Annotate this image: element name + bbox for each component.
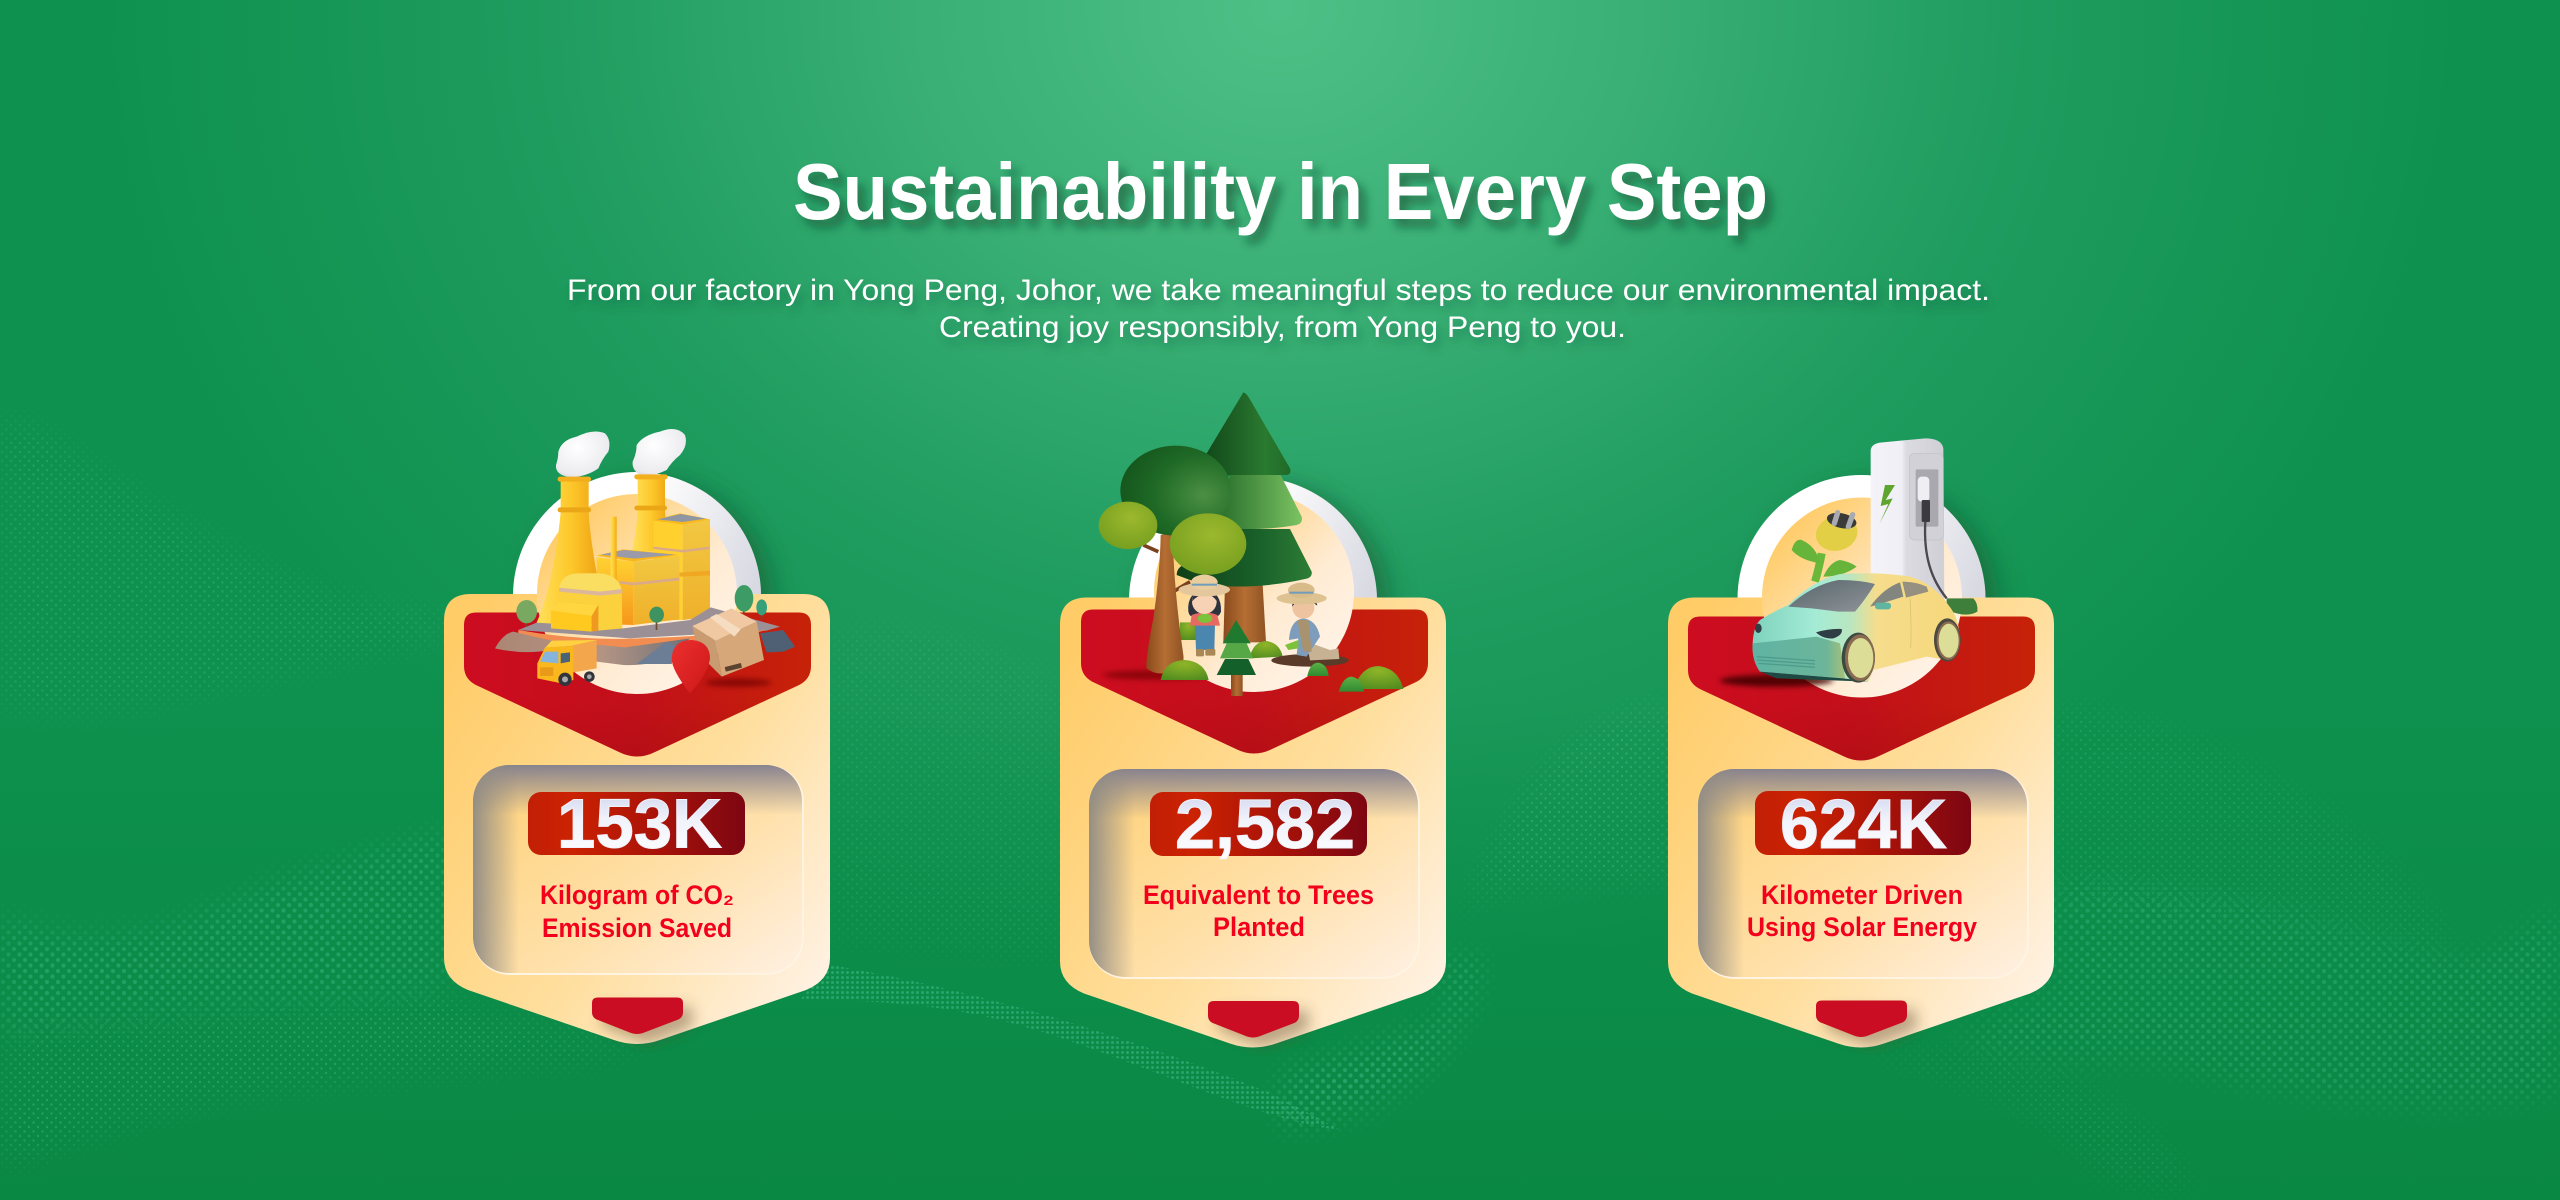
peach circle <box>1762 498 1962 698</box>
stat number pill: 153K <box>557 784 722 862</box>
stat label: Kilometer Driven <box>1761 880 1963 910</box>
plug flower <box>1792 510 1861 582</box>
panel: trees planted <box>1060 392 1446 1048</box>
panel: kilometers on solar energy <box>1668 438 2054 1048</box>
red bottom tab <box>1208 1001 1299 1038</box>
backing white circle <box>1738 475 1986 723</box>
card body <box>444 594 830 1044</box>
peach circle <box>1154 492 1354 692</box>
inset stat panel <box>1698 769 2029 979</box>
dotted wave texture <box>1 420 2560 1186</box>
red chevron header <box>1688 616 2035 760</box>
subtitle <box>567 274 1990 344</box>
stat number pill: 624K <box>1780 785 1947 863</box>
stat label: Using Solar Energy <box>1747 912 1977 942</box>
icon: EV charger and car illustration <box>1720 438 1977 687</box>
red chevron header <box>464 612 811 756</box>
subtitle: From our factory in Yong Peng, Johor, we take meaningful steps to reduce our environmental impact. <box>567 274 1990 307</box>
icon: trees and farmers illustration <box>1099 392 1403 696</box>
delivery truck <box>537 640 597 686</box>
icon: factory illustration <box>495 429 795 693</box>
inset stat panel <box>1089 769 1420 979</box>
stat number pill: 2,582 <box>1175 785 1355 863</box>
stat label <box>1747 880 1977 942</box>
panel: CO2 emission saved <box>444 429 830 1044</box>
title: Sustainability in Every Step <box>793 147 1768 236</box>
card body <box>1668 598 2054 1048</box>
red chevron header <box>1081 610 1428 754</box>
boy figure <box>1271 583 1349 667</box>
stat label <box>1143 880 1374 942</box>
subtitle: Creating joy responsibly, from Yong Peng to you. <box>939 311 1626 344</box>
stat label <box>540 880 734 943</box>
card body <box>1060 598 1446 1048</box>
red bottom tab <box>1816 1000 1907 1037</box>
small pine <box>1217 620 1256 696</box>
stat label: Equivalent to Trees <box>1143 880 1374 910</box>
backing white circle <box>513 472 761 720</box>
stat label: Emission Saved <box>542 913 732 943</box>
backing white circle <box>1129 477 1377 725</box>
girl figure <box>1179 575 1230 656</box>
stat label: Kilogram of CO₂ <box>540 880 734 910</box>
red bottom tab <box>592 998 683 1034</box>
peach circle <box>537 494 737 694</box>
stat label: Planted <box>1213 912 1305 942</box>
inset stat panel <box>473 765 804 975</box>
